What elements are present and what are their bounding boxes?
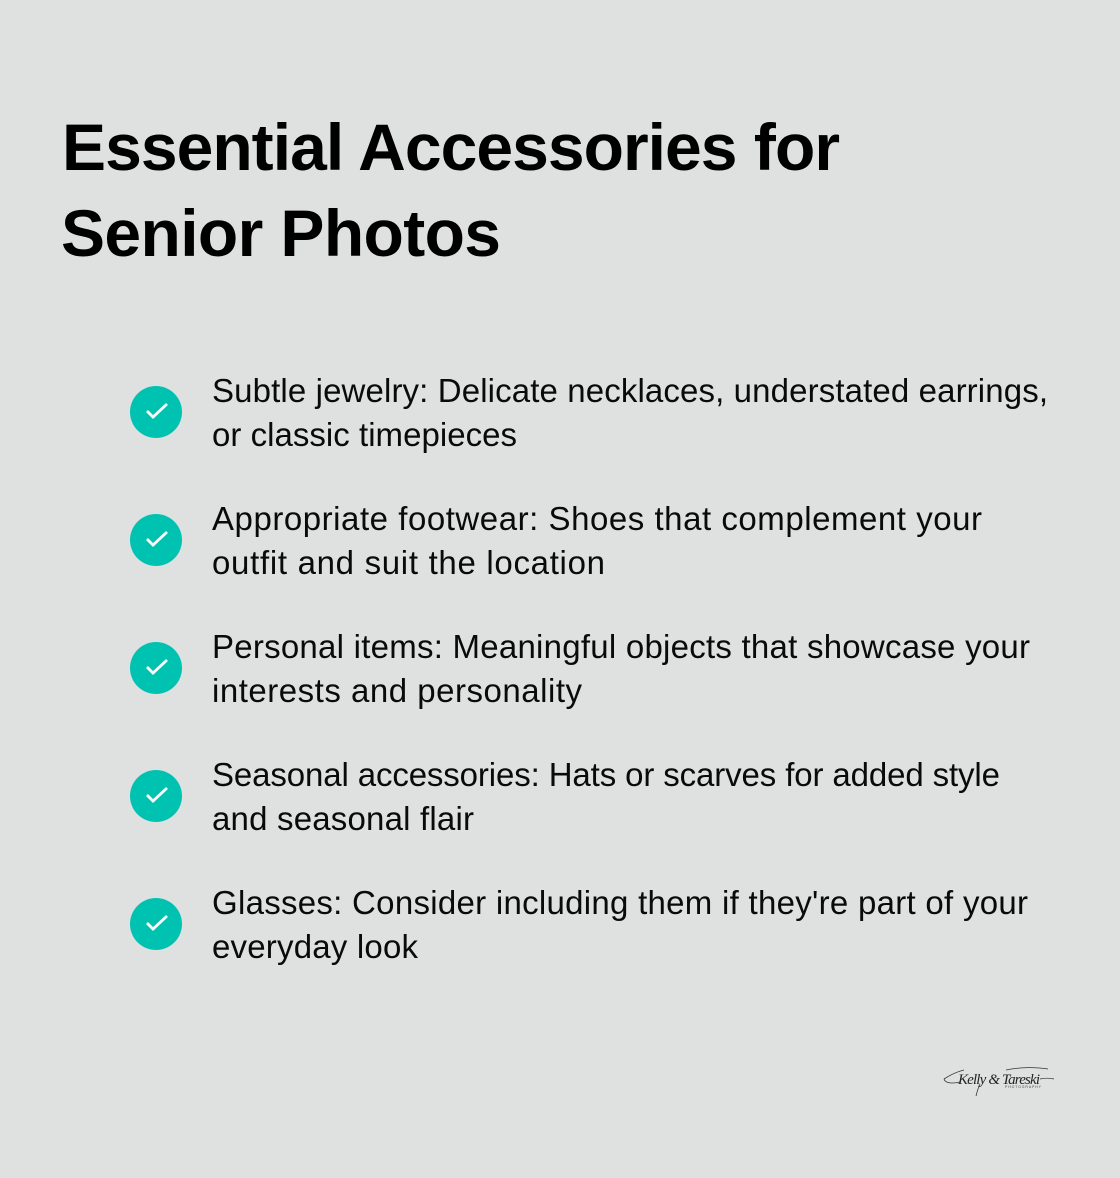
title: Senior Photos (61, 196, 501, 270)
text: personal items: interests and personality (212, 672, 582, 709)
icon: check mark (130, 514, 182, 566)
icon: check mark (130, 642, 182, 694)
title: Essential Accessories for (62, 110, 840, 184)
text: appropriate footwear: outfit and suit the location (212, 544, 605, 581)
text: seasonal accessories (212, 756, 1000, 837)
text: glasses: everyday look (212, 928, 418, 965)
list item: appropriate footwear (130, 500, 982, 581)
text: glasses: Glasses: Consider including them if they're part of your (212, 884, 1028, 921)
list item: personal items (130, 628, 1030, 709)
text: subtle jewelry: or classic timepieces (212, 416, 517, 453)
text: seasonal accessories: and seasonal flair (212, 800, 474, 837)
text: seasonal accessories: Seasonal accessories: Hats or scarves for added style (212, 756, 1000, 793)
text: appropriate footwear: Appropriate footwear: Shoes that complement your (212, 500, 982, 537)
icon: check mark (130, 898, 182, 950)
icon: check mark (130, 770, 182, 822)
text: glasses (212, 884, 1028, 965)
icon: check mark (130, 386, 182, 438)
text: subtle jewelry: Subtle jewelry: Delicate necklaces, understated earrings, (212, 372, 1048, 409)
logo: signature: PHOTOGRAPHY (1005, 1085, 1042, 1089)
text: personal items (212, 628, 1030, 709)
checklist (130, 372, 1048, 965)
logo: signature (944, 1068, 1054, 1096)
text: personal items: Personal items: Meaningful objects that showcase your (212, 628, 1030, 665)
text: subtle jewelry (212, 372, 1048, 453)
logo: signature: Kelly & Tareski (957, 1072, 1040, 1088)
title (61, 110, 840, 270)
list item: seasonal accessories (130, 756, 1000, 837)
list item: glasses (130, 884, 1028, 965)
list item: subtle jewelry (130, 372, 1048, 453)
text: appropriate footwear (212, 500, 982, 581)
